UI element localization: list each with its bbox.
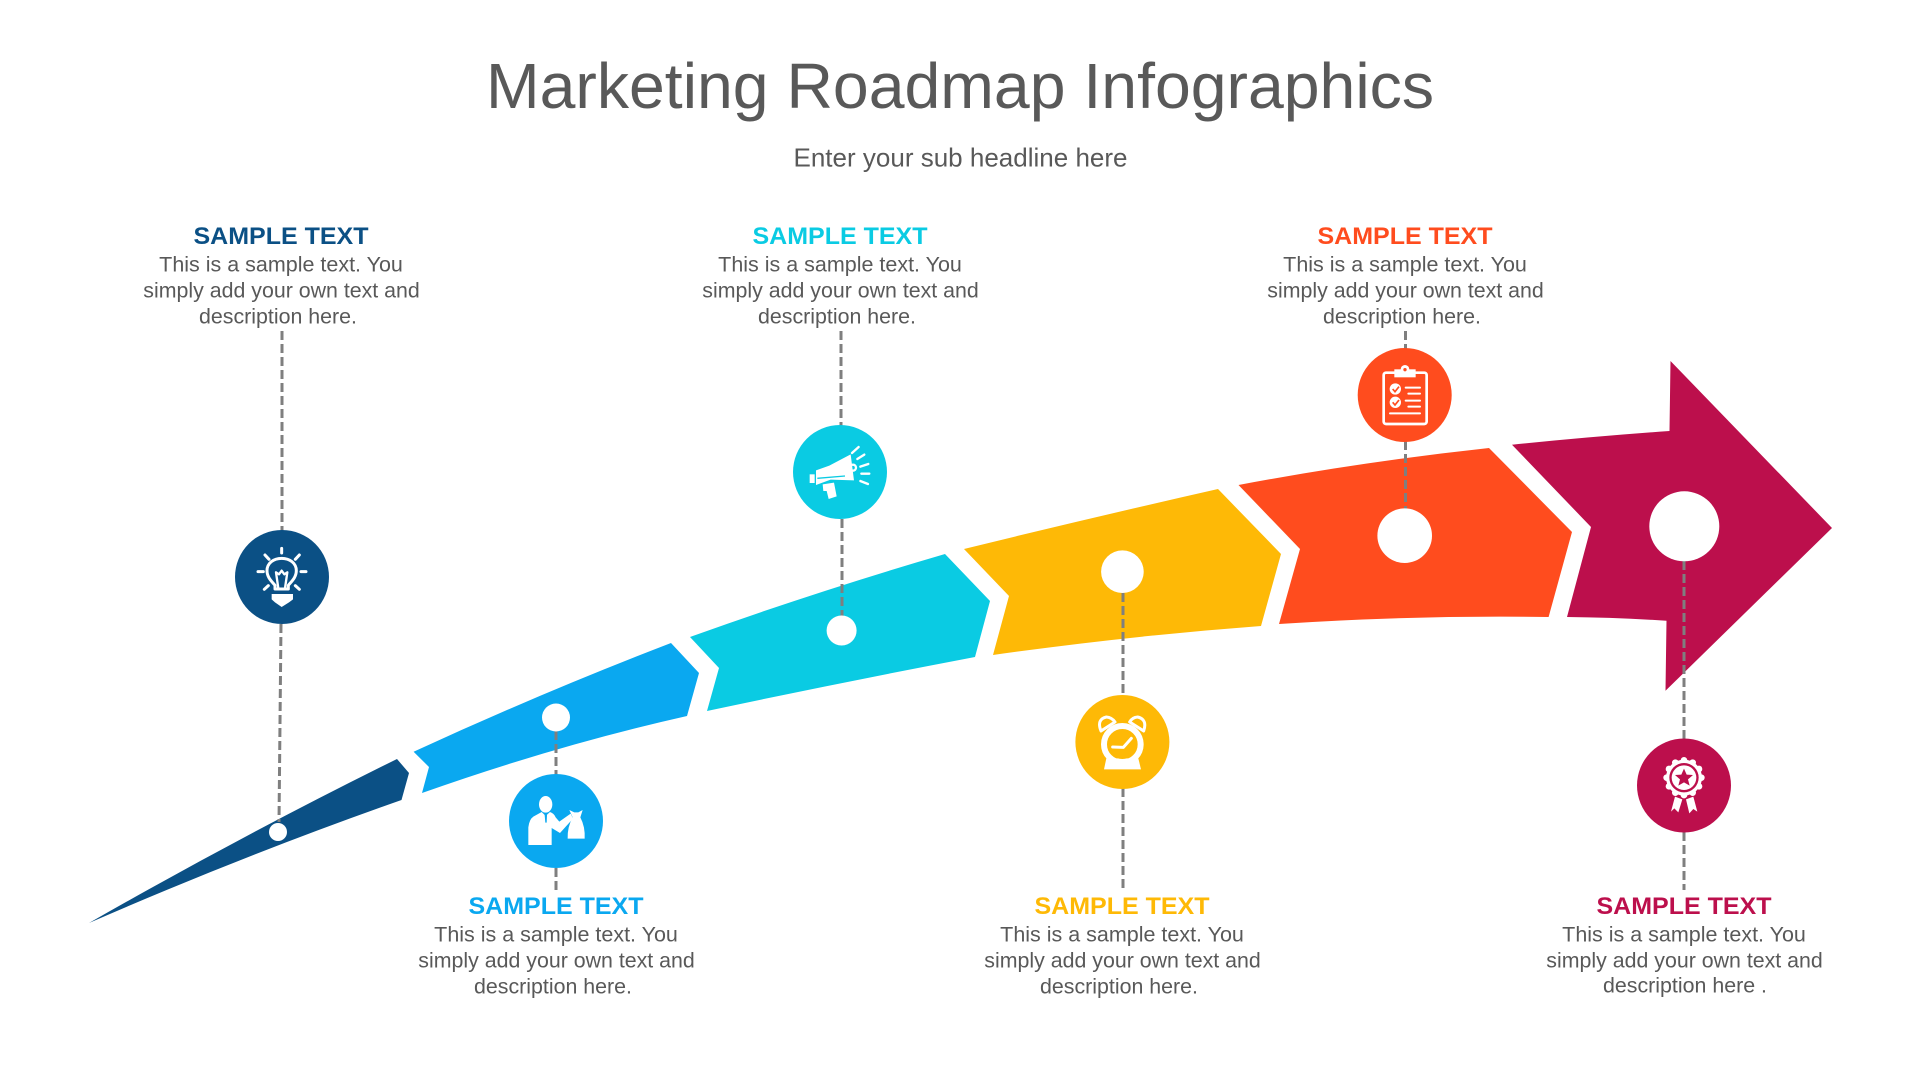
icon: megaphone bbox=[793, 425, 887, 519]
text block: step 5: SAMPLE TEXT bbox=[1318, 223, 1493, 250]
text block: step 1: This is a sample text. You bbox=[159, 254, 403, 277]
segment 5: orange bbox=[1238, 448, 1572, 624]
text block: step 5 bbox=[1267, 223, 1544, 328]
text block: step 6: description here . bbox=[1603, 974, 1767, 997]
text block: step 1 bbox=[143, 223, 420, 328]
icon: alarm clock bbox=[1075, 695, 1169, 789]
text block: step 5: simply add your own text and bbox=[1267, 280, 1544, 303]
icon: clipboard checklist bbox=[1358, 348, 1452, 442]
text block: step 2 bbox=[418, 893, 695, 998]
dot: step 3 bbox=[827, 616, 857, 646]
title: Marketing Roadmap Infographics bbox=[486, 50, 1434, 122]
text block: step 1: simply add your own text and bbox=[143, 280, 420, 303]
text block: step 3: SAMPLE TEXT bbox=[752, 223, 928, 250]
text block: step 1: description here. bbox=[199, 305, 357, 328]
text block: step 2: description here. bbox=[474, 975, 632, 998]
text block: step 3: description here. bbox=[758, 305, 916, 328]
text block: step 2: simply add your own text and bbox=[418, 950, 695, 973]
segment 1: navy tail bbox=[89, 759, 409, 923]
segment 6: crimson arrow head bbox=[1512, 361, 1832, 691]
text block: step 6 bbox=[1546, 893, 1823, 997]
text block: step 4: This is a sample text. You bbox=[1000, 924, 1244, 947]
dot: step 1 bbox=[269, 823, 287, 841]
dot: step 6 bbox=[1649, 491, 1719, 561]
dot: step 4 bbox=[1101, 550, 1144, 593]
subtitle: Enter your sub headline here bbox=[794, 143, 1128, 173]
text block: step 5: This is a sample text. You bbox=[1283, 254, 1527, 277]
text block: step 6: simply add your own text and bbox=[1546, 950, 1823, 973]
connector: step 1 bbox=[279, 331, 282, 822]
text block: step 5: description here. bbox=[1323, 305, 1481, 328]
connector: step 4 bbox=[1122, 593, 1124, 890]
text block: step 3: simply add your own text and bbox=[702, 280, 979, 303]
text block: step 4: SAMPLE TEXT bbox=[1034, 893, 1210, 920]
segment 2: blue bbox=[414, 643, 699, 793]
dot: step 2 bbox=[542, 704, 570, 732]
text block: step 2: SAMPLE TEXT bbox=[468, 893, 644, 920]
text block: step 6: This is a sample text. You bbox=[1562, 924, 1806, 947]
dot: step 5 bbox=[1377, 508, 1432, 563]
text block: step 4: description here. bbox=[1040, 975, 1198, 998]
segment 3: cyan bbox=[690, 554, 990, 711]
text block: step 4: simply add your own text and bbox=[984, 950, 1261, 973]
text block: step 3: This is a sample text. You bbox=[718, 254, 962, 277]
text block: step 3 bbox=[702, 223, 979, 328]
connector: step 6 bbox=[1682, 561, 1686, 890]
connector: step 2 bbox=[554, 731, 558, 890]
segment 4: yellow bbox=[964, 489, 1281, 655]
icon: light bulb bbox=[235, 530, 329, 624]
roadmap arrow bbox=[89, 361, 1832, 923]
connector: step 3 bbox=[841, 331, 842, 616]
text block: step 4 bbox=[984, 893, 1261, 998]
icon: award ribbon bbox=[1637, 738, 1731, 832]
connector: step 5 bbox=[1404, 331, 1407, 510]
text block: step 6: SAMPLE TEXT bbox=[1596, 893, 1772, 920]
text block: step 2: This is a sample text. You bbox=[434, 924, 678, 947]
icon: businessman with bag bbox=[509, 774, 603, 868]
text block: step 1: SAMPLE TEXT bbox=[194, 223, 369, 250]
